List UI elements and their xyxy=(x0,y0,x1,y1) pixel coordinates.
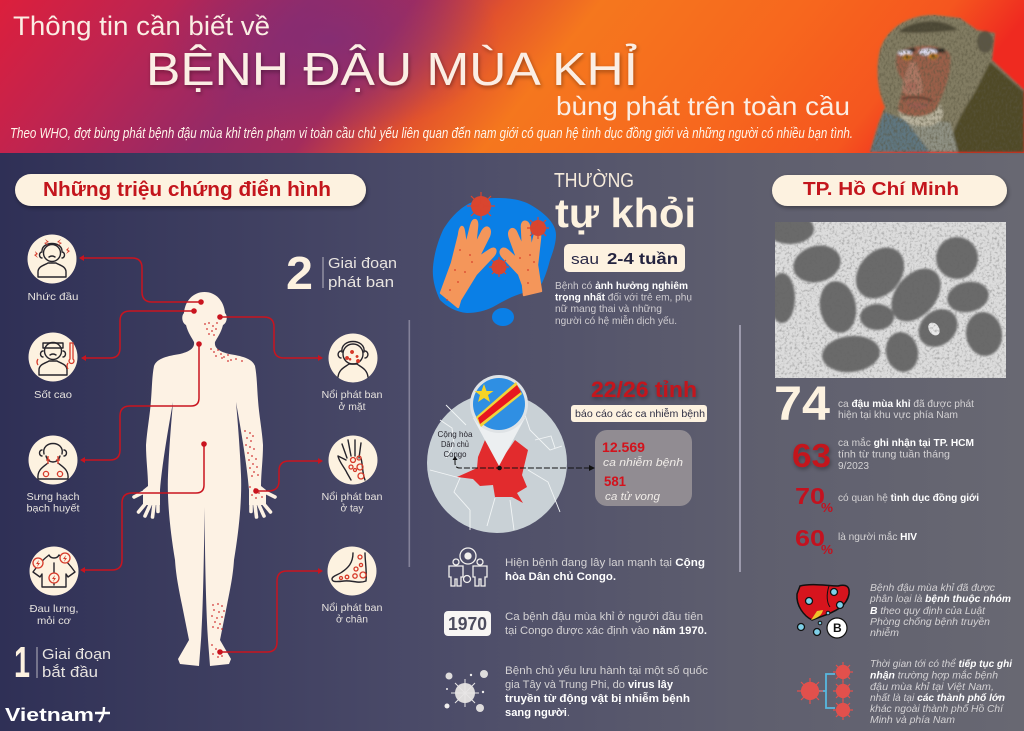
label: DRC xyxy=(438,429,473,459)
stat: 63 cases: 63 xyxy=(792,437,831,474)
label: hand rash: ở tay xyxy=(340,502,364,514)
icon: headache xyxy=(28,234,76,284)
connector: foot rash xyxy=(217,568,323,655)
stage 1 label: 1 xyxy=(14,638,30,687)
text: future cases: đậu mùa khỉ tại Việt Nam, xyxy=(870,681,994,693)
pill: after 2-4 weeks xyxy=(564,244,685,272)
stat: 74 cases xyxy=(774,378,974,431)
stat: 63 cases: 9/2023 xyxy=(838,460,869,472)
connector: headache xyxy=(79,255,204,305)
text: severity: trọng nhất đối với trẻ em, phụ xyxy=(555,292,692,304)
stage 1 label: bắt đầu xyxy=(42,664,98,681)
label: face rash xyxy=(322,389,383,413)
panel: self-limiting xyxy=(433,169,696,327)
text: endemic regions: gia Tây và Trung Phi, do virus lây xyxy=(505,679,674,691)
label: DRC: Dân chủ xyxy=(441,439,469,449)
heading pill: symptoms xyxy=(15,174,366,206)
stage 2 label: phát ban xyxy=(328,274,394,291)
subtitle: bùng phát trên toàn cầu xyxy=(556,91,850,121)
label: back pain xyxy=(30,603,78,627)
text: first case 1970: Ca bệnh đậu mùa khỉ ở người đầu tiên xyxy=(505,611,703,623)
stat: 22/26 provinces: 22/26 tỉnh xyxy=(591,377,697,402)
text: future cases xyxy=(870,658,1013,726)
stat: 60 percent: % xyxy=(821,542,833,557)
label: hand rash: Nổi phát ban xyxy=(322,491,383,503)
stat: 22/26 provinces xyxy=(571,377,707,422)
label: DRC: Congo xyxy=(444,449,467,459)
logo: Vietnam+: Vietnam xyxy=(5,705,94,725)
connector: face rash xyxy=(217,314,323,361)
stat: 70 percent: % xyxy=(821,500,833,515)
box: cases and deaths: 12.569 xyxy=(602,439,645,455)
text: DRC spreading: Hiện bệnh đang lây lan mạnh tại Cộng xyxy=(505,557,705,569)
stage 2 label: 2 xyxy=(286,247,313,299)
label: back pain: Đau lưng, xyxy=(30,603,78,615)
text: group B disease xyxy=(869,582,1011,639)
stage 1 label: Giai đoạn xyxy=(42,646,111,663)
logo: Vietnam+ xyxy=(5,705,110,725)
box: cases and deaths: ca nhiễm bệnh xyxy=(603,456,683,469)
label: face rash: ở mặt xyxy=(338,401,366,413)
text: group B disease: Phòng chống bệnh truyền xyxy=(870,616,990,628)
illustration: hands with virus xyxy=(433,192,556,326)
label: back pain: mỏi cơ xyxy=(37,615,71,627)
badge: 1970: 1970 xyxy=(448,614,487,634)
divider left xyxy=(408,320,410,567)
stat: 60 percent: 60 xyxy=(795,525,825,551)
stat: 74 cases: hiện tại khu vực phía Nam xyxy=(838,409,958,421)
connector: fever xyxy=(81,308,197,361)
text: DRC spreading: hòa Dân chủ Congo. xyxy=(505,571,616,583)
stat: 70 percent: 70 xyxy=(795,483,825,509)
icon: face rash xyxy=(328,334,378,382)
text: group B disease: B theo quy định của Luật xyxy=(870,605,986,617)
label: fever: Sốt cao xyxy=(34,389,72,401)
box: cases and deaths: ca tử vong xyxy=(605,491,661,503)
stage 2 label: Giai đoạn xyxy=(328,255,397,272)
text: severity: Bệnh có ảnh hưởng nghiêm xyxy=(555,280,688,292)
text: endemic regions: Bệnh chủ yếu lưu hành tại một số quốc xyxy=(505,665,709,677)
icon: hand rash xyxy=(328,436,378,484)
text: endemic regions xyxy=(505,665,709,719)
text: future cases: nhận trường hợp mắc bệnh xyxy=(870,668,998,682)
text: DRC spreading xyxy=(505,557,705,583)
map pin with flag xyxy=(473,418,525,466)
icon: liver with virus and B xyxy=(797,585,849,638)
map: Congo xyxy=(427,375,595,533)
icon: back pain xyxy=(30,546,78,596)
text: severity: nữ mang thai và những xyxy=(555,303,662,315)
heading: usually self-limiting: tự khỏi xyxy=(555,190,696,236)
label: headache: Nhức đầu xyxy=(28,291,79,303)
heading pill: symptoms: Những triệu chứng điển hình xyxy=(43,179,331,201)
icon: people and virus xyxy=(449,548,487,586)
label: lymph nodes xyxy=(26,491,80,514)
label: face rash: Nổi phát ban xyxy=(322,389,383,401)
stat: 60 percent xyxy=(795,525,917,557)
text: group B disease: Bệnh đậu mùa khỉ đã được xyxy=(870,582,996,594)
text: first case 1970: tại Congo được xác định vào năm 1970. xyxy=(505,625,707,637)
label: DRC: Cộng hòa xyxy=(438,429,473,439)
text: future cases: khác ngoài thành phố Hồ Chí xyxy=(870,703,1004,715)
pill: after 2-4 weeks: 2-4 tuần xyxy=(607,251,678,268)
arrow: map to figures xyxy=(452,456,595,471)
heading: usually self-limiting: THƯỜNG xyxy=(554,169,634,192)
box: cases and deaths: 581 xyxy=(604,473,626,489)
icon: swollen lymph nodes xyxy=(28,436,78,484)
stat: 74 cases: 74 xyxy=(774,378,830,431)
icon: fever xyxy=(28,332,78,382)
main title: BỆNH ĐẬU MÙA KHỈ xyxy=(146,43,638,95)
connector: hand rash xyxy=(253,458,323,494)
pill: after 2-4 weeks: sau xyxy=(571,251,599,268)
text: group B disease: phân loại là bệnh thuộc nhóm xyxy=(869,593,1011,605)
human body figure xyxy=(134,292,275,666)
text: first case 1970 xyxy=(505,611,707,637)
panel: Congo xyxy=(427,375,709,719)
box: cases and deaths xyxy=(595,430,692,506)
heading: usually self-limiting xyxy=(554,169,696,236)
header banner xyxy=(0,0,1024,153)
icon: virus cluster xyxy=(444,670,488,712)
text: group B disease: nhiễm xyxy=(870,626,899,639)
text: severity xyxy=(555,280,692,327)
label: hand rash xyxy=(322,491,383,514)
label: lymph nodes: Sưng hạch xyxy=(26,491,80,503)
text: severity: người có hệ miễn dịch yếu. xyxy=(555,314,677,327)
rash dots on body xyxy=(205,323,262,657)
heading pill: HCMC: TP. Hồ Chí Minh xyxy=(803,179,959,199)
text: endemic regions: sang người. xyxy=(505,707,570,719)
stage 2 label xyxy=(286,247,397,299)
stat: 63 cases xyxy=(792,436,974,474)
label: foot rash xyxy=(322,602,383,626)
stat: 22/26 provinces: báo cáo các ca nhiễm bệnh xyxy=(575,407,705,420)
connector: back pain xyxy=(80,441,207,573)
title intro: Thông tin cần biết về xyxy=(13,11,270,41)
stat: 60 percent: là người mắc HIV xyxy=(838,530,917,543)
divider right xyxy=(739,325,741,572)
stat: 63 cases: ca mắc ghi nhận tại TP. HCM xyxy=(838,436,974,449)
heading pill: HCMC xyxy=(772,175,1007,206)
stage 1 label xyxy=(14,638,111,687)
icon: virus spreading xyxy=(797,662,853,720)
stat: 70 percent: có quan hệ tình dục đồng giới xyxy=(838,492,979,504)
text: future cases: nhất là tại các thành phố lớn xyxy=(870,692,1005,704)
label: lymph nodes: bạch huyết xyxy=(26,502,80,514)
photo: virus micrograph xyxy=(766,214,1006,378)
stat: 70 percent xyxy=(795,483,979,515)
icon: liver with virus and B: B xyxy=(833,621,842,635)
panel: Ho Chi Minh City xyxy=(766,175,1013,726)
label: foot rash: ở chân xyxy=(336,614,368,626)
badge: 1970 xyxy=(444,611,491,636)
text: future cases: Minh và phía Nam xyxy=(870,714,955,726)
stat: 74 cases: ca đậu mùa khỉ đã được phát xyxy=(838,398,974,410)
stat: 63 cases: tính từ trung tuần tháng xyxy=(838,448,950,460)
text: endemic regions: truyền từ động vật bị nhiễm bệnh xyxy=(505,692,690,705)
text: future cases: Thời gian tới có thể tiếp tục ghi xyxy=(870,658,1013,670)
icon: foot rash xyxy=(328,546,376,596)
monkey portrait xyxy=(870,15,1024,152)
connector: lymph nodes xyxy=(80,341,202,463)
label: foot rash: Nổi phát ban xyxy=(322,602,383,614)
panel: symptoms xyxy=(5,174,397,725)
